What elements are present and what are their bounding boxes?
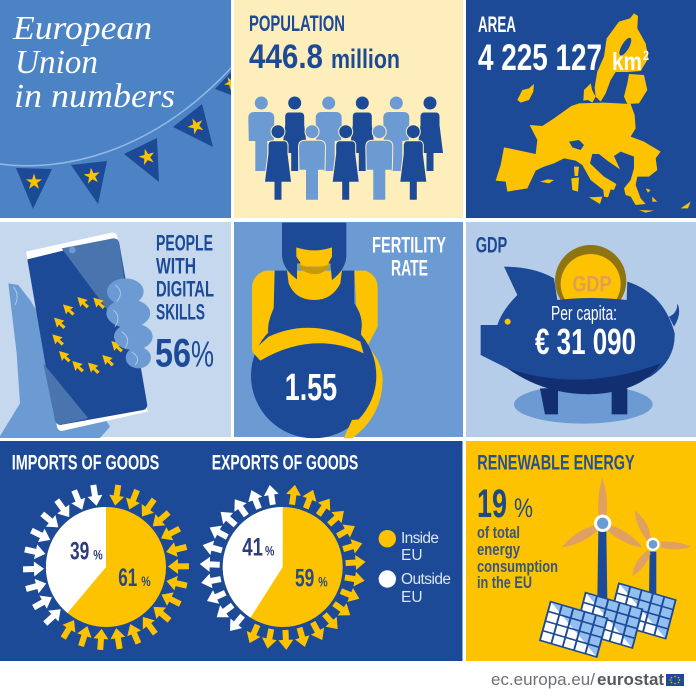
panel: area: [466, 0, 696, 218]
area value: 4 225 127: [478, 37, 602, 78]
area value: 2: [643, 47, 649, 63]
renewable description: [477, 524, 558, 592]
pig belly shade: [507, 363, 661, 394]
arm band over belly: [252, 328, 364, 361]
pig eye: [505, 319, 511, 325]
belly: [251, 332, 376, 438]
GDP value: € 31 090: [535, 321, 636, 362]
fertility heading: RATE: [391, 256, 428, 281]
imports heading: IMPORTS OF GOODS: [12, 451, 159, 474]
panel: GDP: [466, 222, 696, 437]
exports pie chart: [199, 484, 366, 650]
fertility heading: FERTILITY: [372, 233, 446, 258]
renewable description: of total: [477, 524, 520, 542]
GDP heading: GDP: [476, 233, 507, 258]
exports inside value: %: [318, 574, 328, 590]
footer: source url: [491, 670, 664, 689]
title: [12, 10, 175, 115]
belly crescent: [344, 340, 383, 438]
population value: [249, 38, 400, 76]
panel: population: [234, 0, 463, 218]
piggy bank illustration: [481, 245, 679, 424]
digital skills heading: SKILLS: [156, 299, 205, 324]
icon: EU flag: [666, 674, 684, 686]
panel: fertility rate: [234, 222, 463, 438]
imports pie chart: [23, 484, 189, 650]
title: in numbers: [14, 78, 175, 115]
title: Union: [15, 44, 98, 81]
shadow: [514, 385, 653, 424]
legend: Outside: [401, 571, 451, 588]
digital skills value: %: [191, 334, 214, 375]
neck and chest: [287, 271, 342, 300]
arms: [252, 271, 275, 361]
bunting string: [0, 68, 231, 166]
hand: [0, 283, 110, 438]
map of the EU: [496, 13, 691, 213]
panel: renewable energy: [466, 441, 696, 661]
population heading: POPULATION: [249, 11, 345, 36]
bunting flags with stars: [16, 72, 240, 209]
screen reflection: [43, 238, 133, 425]
population value: million: [331, 44, 400, 74]
imports outside EU arrows: [23, 484, 104, 629]
imports outside value: 39: [70, 537, 89, 565]
title: European: [12, 10, 152, 47]
GDP per capita label: Per capita:: [551, 303, 617, 325]
people icons: [248, 96, 443, 200]
exports inside value: 59: [295, 565, 314, 593]
phone in hand illustration: [0, 233, 153, 438]
coin: GDP: [572, 272, 612, 297]
chin shadow: [297, 264, 331, 274]
footer: source url: eurostat: [597, 670, 664, 689]
legs: [540, 388, 627, 414]
area heading: AREA: [478, 12, 516, 37]
digital skills heading: [156, 231, 214, 324]
fingers: [106, 278, 153, 368]
EU star cursors: [52, 297, 123, 374]
phone screen: [27, 238, 147, 425]
renewable description: in the EU: [477, 574, 532, 592]
small turbine: [632, 511, 691, 597]
renewable value: 19: [477, 482, 507, 526]
solar panels: [540, 583, 676, 657]
belly crescent notch: [344, 419, 359, 438]
exports outside value: %: [265, 543, 275, 559]
tail: [669, 303, 679, 327]
pregnant woman illustration: [251, 223, 383, 438]
legend: EU: [401, 589, 423, 606]
phone body: [26, 233, 148, 431]
imports inside value: %: [141, 573, 151, 589]
renewable value: %: [514, 493, 533, 523]
imports outside value: %: [93, 546, 103, 562]
panel: title: [0, 0, 240, 218]
digital skills heading: PEOPLE: [156, 231, 213, 256]
wind turbines and solar panels: [540, 477, 691, 657]
legend: Inside: [401, 530, 439, 547]
population value: 446.8: [249, 38, 323, 76]
fertility value: 1.55: [285, 367, 337, 409]
legend: EU: [401, 547, 423, 564]
pig body: [481, 267, 675, 390]
imports inside EU arrows: [57, 484, 189, 650]
camera: [69, 247, 76, 253]
renewable description: consumption: [477, 558, 558, 576]
panel: digital skills: [0, 222, 231, 438]
exports outside value: 41: [242, 534, 263, 562]
exports inside EU arrows: [243, 484, 366, 650]
imports inside value: 61: [118, 564, 137, 592]
coin: [555, 245, 626, 316]
fertility heading: [372, 233, 446, 281]
exports outside EU arrows: [199, 484, 280, 636]
renewable description: energy: [477, 541, 521, 559]
panel: imports and exports: [0, 441, 462, 661]
exports heading: EXPORTS OF GOODS: [212, 451, 358, 474]
face: [296, 247, 332, 267]
digital skills heading: DIGITAL: [156, 277, 214, 302]
hair: [282, 223, 346, 280]
digital skills value: 56: [155, 332, 191, 376]
digital skills heading: WITH: [156, 253, 196, 278]
area value: km: [612, 48, 642, 76]
top: [268, 270, 362, 335]
footer: source url: ec.europa.eu/: [491, 670, 595, 689]
large turbine: [562, 477, 642, 600]
legend: [379, 530, 451, 606]
